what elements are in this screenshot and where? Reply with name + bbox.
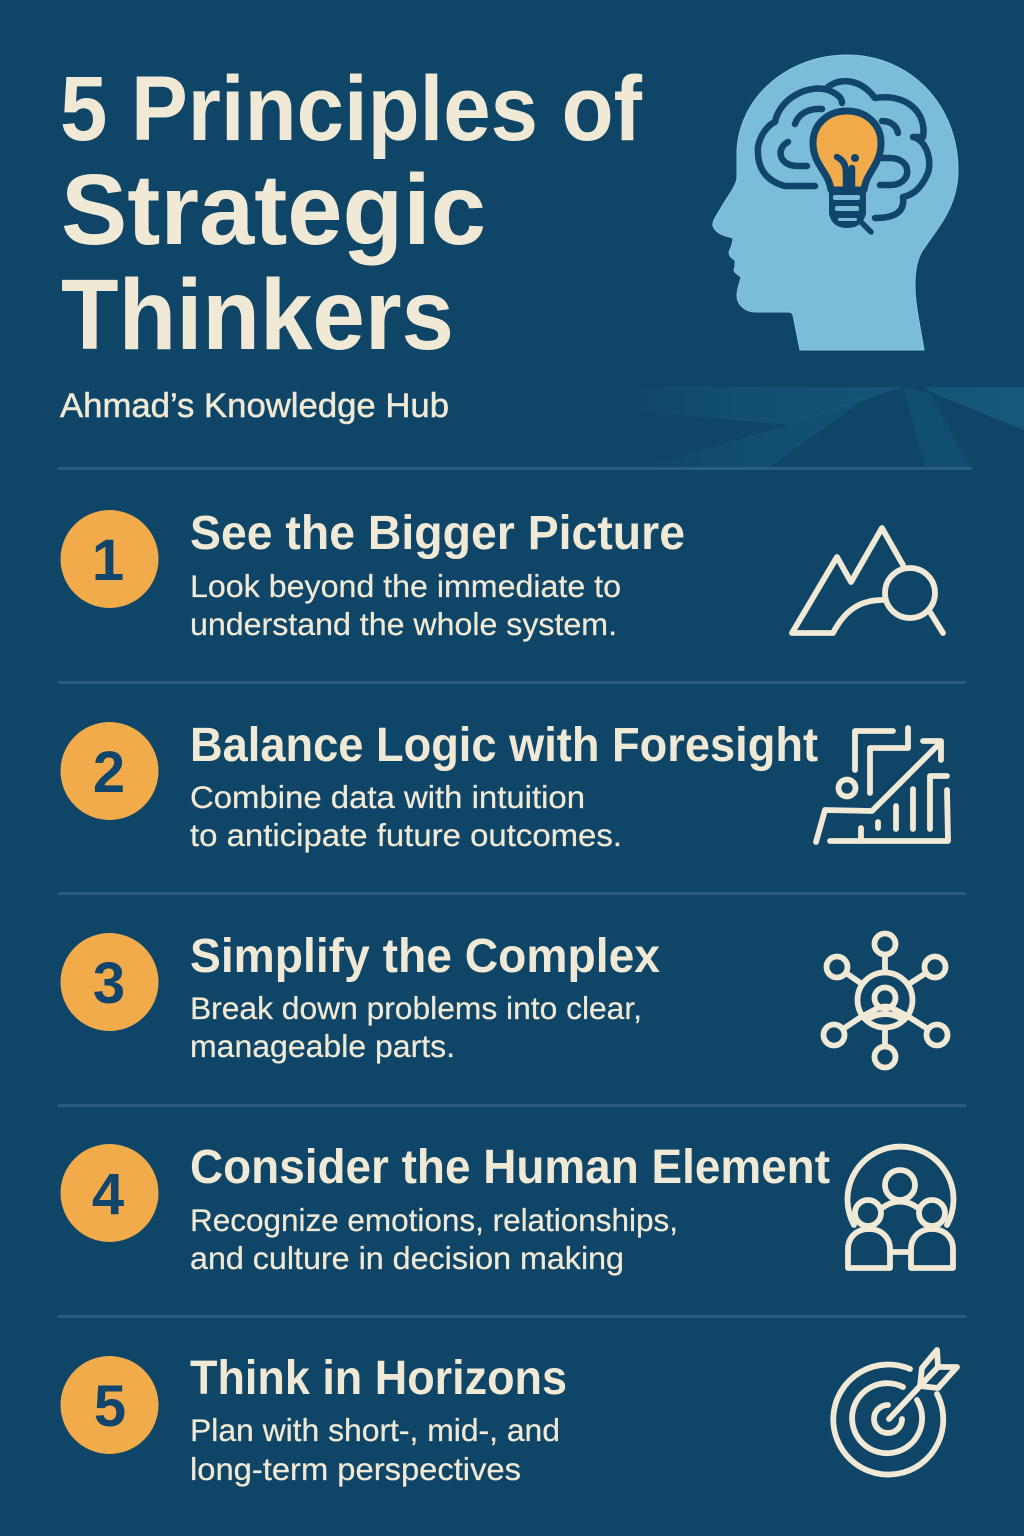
description 4 (190, 1202, 678, 1276)
icon: mountain with magnifier (792, 528, 943, 633)
divider (58, 1315, 966, 1318)
light bulb filament (837, 157, 852, 188)
principle 4 (60, 1141, 953, 1276)
icon: group of people in an arch (848, 1147, 953, 1268)
title: Thinkers (61, 259, 454, 371)
description 1: Look beyond the immediate to (190, 568, 621, 604)
divider (58, 892, 966, 895)
description 5: Plan with short-, mid-, and (190, 1412, 560, 1448)
number badge 2 (60, 722, 158, 820)
principle 1 (60, 507, 943, 642)
description 5: long-term perspectives (190, 1451, 521, 1487)
principle 5 (60, 1350, 957, 1487)
description 3 (190, 990, 642, 1064)
heading 3: Simplify the Complex (190, 930, 660, 983)
divider (58, 681, 966, 684)
subtitle: Ahmad’s Knowledge Hub (60, 387, 449, 425)
title: 5 Principles of (60, 58, 642, 160)
number badge 5: 5 (94, 1374, 126, 1439)
description 1 (190, 568, 621, 642)
title (60, 58, 642, 371)
number badge 5 (60, 1356, 158, 1454)
principle 3 (60, 930, 948, 1068)
number badge 4 (60, 1144, 158, 1242)
number badge 3 (60, 933, 158, 1031)
background light rays (620, 387, 1024, 467)
heading 2: Balance Logic with Foresight (190, 719, 818, 772)
divider (58, 1104, 966, 1107)
head silhouette (713, 55, 958, 350)
light bulb glass (813, 111, 881, 190)
number badge 3: 3 (93, 951, 125, 1016)
description 4: and culture in decision making (190, 1240, 624, 1276)
description 3: manageable parts. (190, 1028, 455, 1064)
number badge 4: 4 (92, 1162, 124, 1227)
number badge 2: 2 (93, 740, 125, 805)
principle 2 (60, 719, 948, 853)
description 5 (190, 1412, 560, 1487)
heading 1: See the Bigger Picture (190, 507, 685, 560)
divider (58, 467, 972, 470)
number badge 1 (60, 510, 158, 608)
description 1: understand the whole system. (190, 606, 617, 642)
description 2: Combine data with intuition (190, 779, 585, 815)
description 3: Break down problems into clear, (190, 990, 642, 1026)
heading 5: Think in Horizons (190, 1352, 567, 1405)
number badge 1: 1 (92, 528, 124, 593)
icon: chart with rising arrow (816, 728, 948, 842)
brain outline (758, 81, 929, 218)
description 2 (190, 779, 622, 853)
icon: network of nodes (824, 934, 948, 1068)
title: Strategic (61, 154, 486, 266)
description 2: to anticipate future outcomes. (190, 817, 622, 853)
heading 4: Consider the Human Element (190, 1141, 830, 1194)
light bulb base (829, 190, 871, 232)
icon: head with brain and light bulb (713, 55, 958, 350)
description 4: Recognize emotions, relationships, (190, 1202, 678, 1238)
icon: target with arrow (833, 1350, 957, 1475)
